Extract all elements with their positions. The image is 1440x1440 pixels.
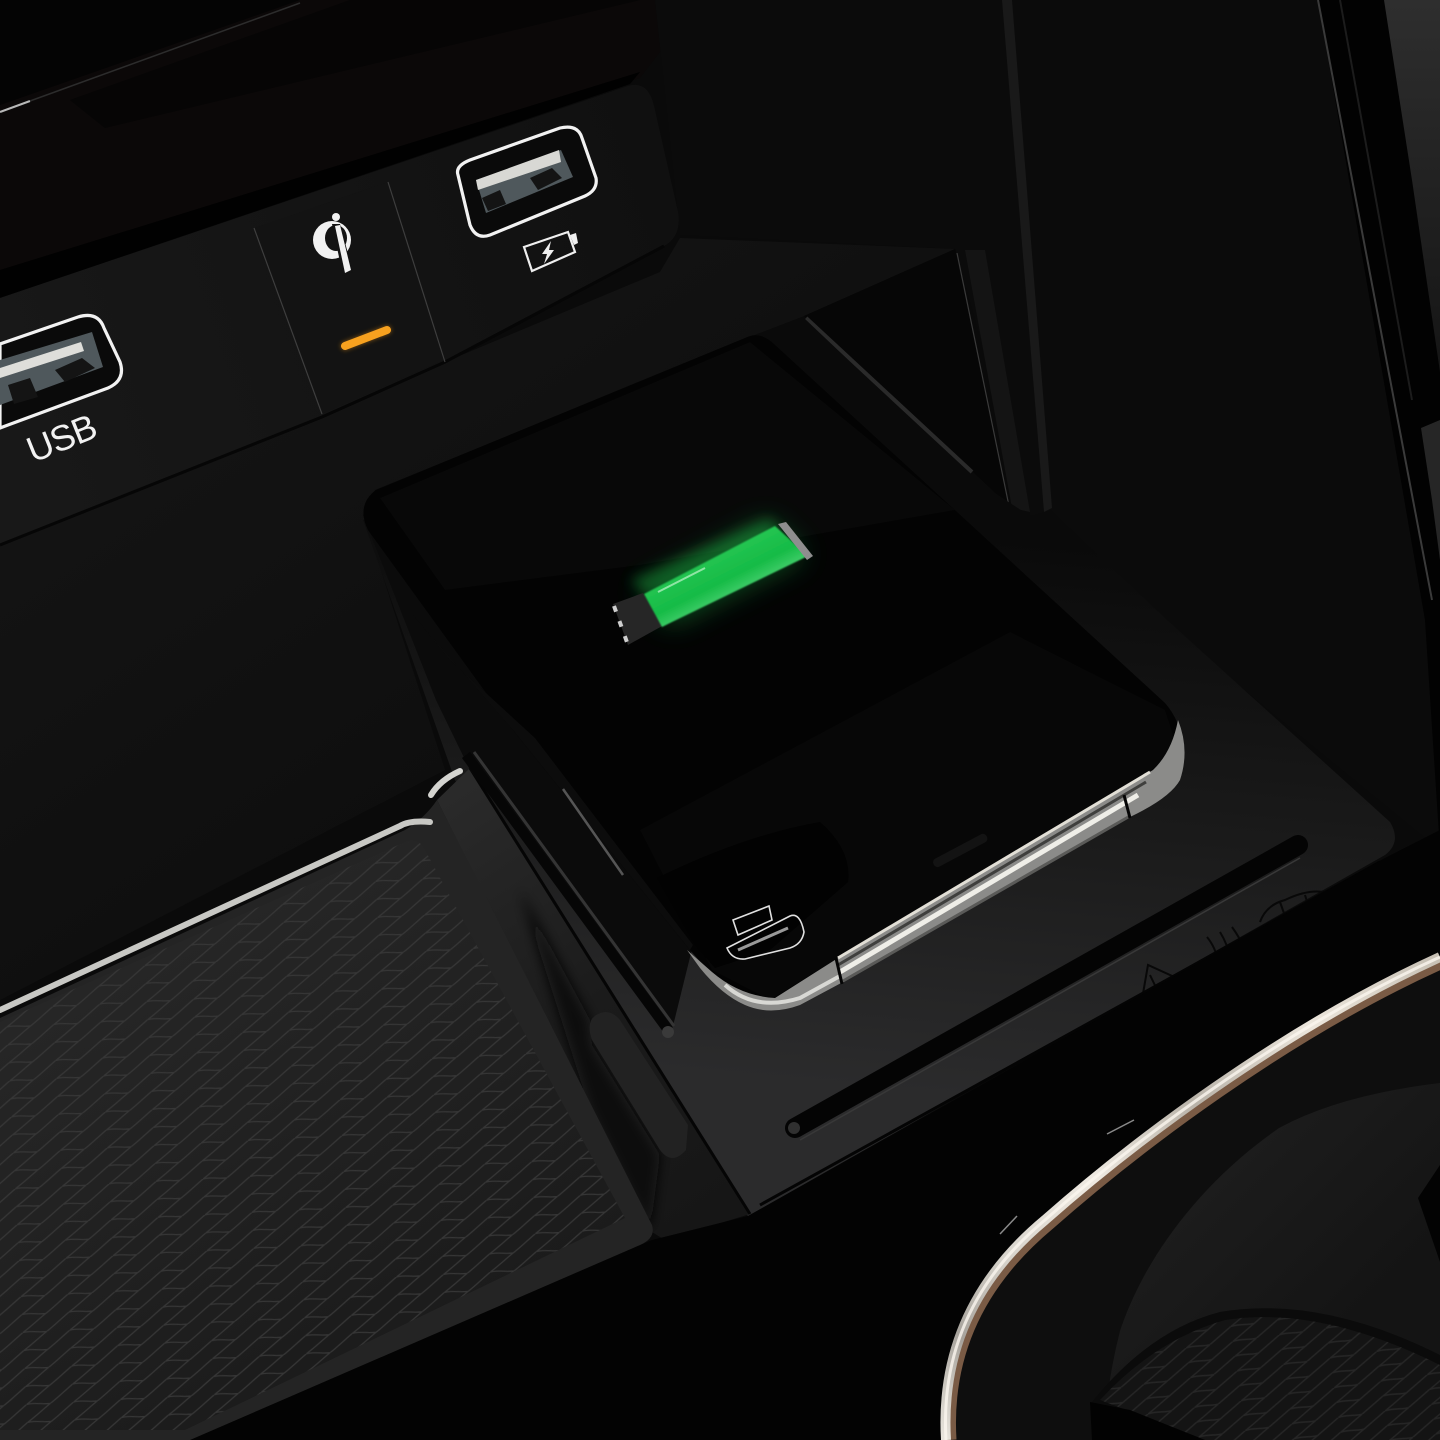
battery sheen [658, 568, 705, 592]
metal edge dark line [838, 782, 1146, 965]
ring silver [945, 957, 1440, 1440]
metal edge bright stripe [840, 795, 1138, 972]
cup holder mesh texture [1100, 1317, 1440, 1440]
usb right outline [458, 127, 596, 236]
tray lower groove line [760, 862, 1380, 1205]
battery green fill [644, 526, 808, 627]
cup holder mesh base [1092, 1308, 1440, 1440]
corner chrome [725, 976, 840, 1003]
warning triangle [1141, 965, 1192, 1005]
screen bezel at top [0, 0, 700, 298]
book symbol [1260, 892, 1332, 930]
orange indicator [345, 330, 387, 346]
right dark interior panel [655, 0, 1440, 850]
USB label: USB [21, 405, 103, 470]
metal edge band [687, 720, 1185, 1010]
phone side glint [563, 789, 623, 875]
left side rail of tray [437, 768, 750, 1240]
ring bronze edge [948, 962, 1440, 1440]
tray slot beside phone [466, 752, 674, 1038]
glossy phone flank [365, 520, 693, 1030]
speaker slot [932, 832, 989, 868]
lower black fascia [190, 830, 1440, 1440]
wireless charging tray [363, 318, 1395, 1216]
mat silver trim [0, 771, 460, 1010]
battery terminals [614, 606, 628, 645]
antenna line left [836, 958, 842, 984]
usb left bar [0, 342, 84, 378]
phone glass [364, 335, 1181, 1004]
cup holder black reflection [1090, 1402, 1205, 1440]
metal edge highlight [838, 772, 1150, 958]
lower screen shadow shape [657, 822, 848, 968]
charge icon on phone [727, 906, 804, 959]
storage opening above phone [804, 249, 1030, 512]
metal edge lower grey [843, 816, 1130, 981]
battery empty part [613, 593, 664, 645]
usb left outline [0, 315, 122, 428]
cup holder right shadow [1418, 1165, 1440, 1262]
phone left side gloss [413, 615, 693, 950]
textured storage mat [0, 800, 653, 1440]
heat symbol [1207, 927, 1245, 962]
embossed tray symbols [1141, 892, 1332, 1005]
usb right metal [476, 150, 573, 213]
cup holder [945, 957, 1440, 1440]
green battery [613, 518, 813, 645]
antenna line right [1124, 795, 1130, 818]
smartphone [364, 335, 1185, 1010]
usb charging port [458, 127, 596, 236]
embossed slit [788, 845, 1300, 1140]
ring highlight [945, 957, 1440, 1440]
port panel with USB and qi controls [0, 85, 679, 545]
usb right bar [476, 150, 561, 190]
ring glint lower [1000, 1216, 1017, 1234]
battery charging icon [524, 232, 578, 271]
usb right contacts [482, 190, 506, 211]
battery cap [778, 522, 813, 560]
qi logo [313, 213, 353, 276]
usb left contacts 2 [55, 358, 95, 382]
usb left contacts [8, 378, 38, 404]
cup holder inner leather [945, 959, 1440, 1440]
usb left metal [0, 332, 103, 405]
cup holder bowl [1105, 1083, 1440, 1440]
lower trim panel [0, 238, 955, 1000]
usb right contacts 2 [530, 168, 562, 190]
usb port left [0, 315, 122, 428]
glass reflections [380, 342, 955, 590]
ring glint upper [1107, 1120, 1134, 1134]
